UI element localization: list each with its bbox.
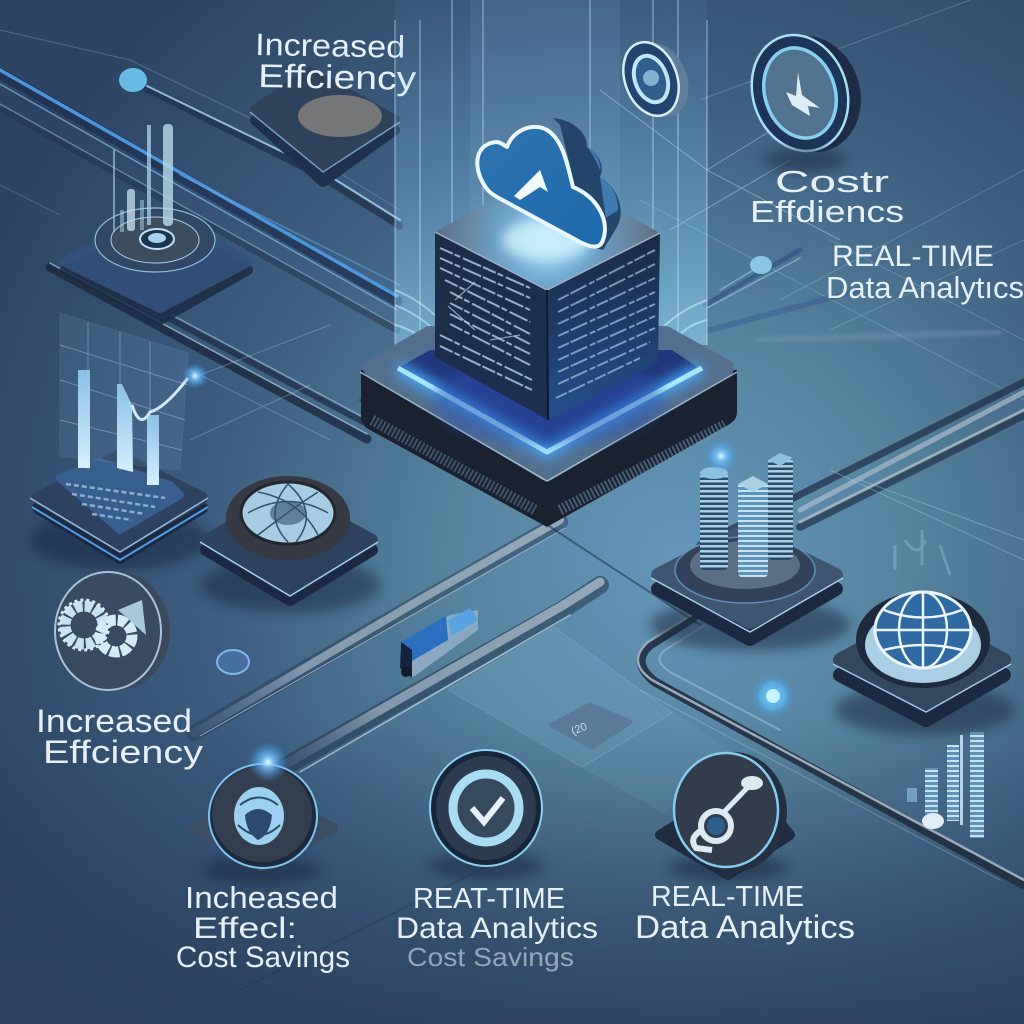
text: Increased Efficiency Cost Savings: Incheased — [185, 880, 338, 915]
central platform — [360, 335, 737, 527]
tower — [768, 458, 793, 560]
heading: Increased Efficiency left — [36, 703, 203, 770]
text: Real-Time Data Analytics Cost Savings — [396, 883, 598, 972]
icon: cloud — [477, 118, 621, 250]
heading: Increased Efficiency top: Increased — [255, 27, 405, 65]
text: Real-Time Data Analytics: REAL-TIME — [651, 881, 804, 913]
server towers platform — [650, 440, 850, 651]
small chip — [552, 705, 630, 747]
icon: medallion top center — [614, 34, 698, 125]
glass bar chart panel — [60, 313, 208, 485]
cube code lines left — [440, 248, 532, 390]
marker dot right — [750, 256, 772, 274]
shadow under clock — [763, 148, 847, 172]
isometric skyline platform — [65, 124, 248, 320]
icon: clock medallion — [737, 22, 876, 166]
text: Real-Time Data Analytics Cost Savings: Cost Savings — [407, 942, 574, 972]
bar cluster bottom right — [907, 732, 984, 838]
heading: Real-Time Data Analytics top right — [826, 240, 1024, 305]
heading: Increased Efficiency left: Increased — [36, 703, 192, 739]
data cube — [433, 170, 663, 445]
heading: Increased Efficiency top: Effciency — [258, 57, 417, 97]
text: Real-Time Data Analytics Cost Savings: Data Analytics — [396, 912, 598, 945]
icon: key medallion — [660, 752, 790, 882]
heading: Real-Time Data Analytics top right: Data Analytıcs — [826, 270, 1024, 305]
dial platform — [200, 476, 380, 613]
glowing node — [751, 674, 795, 718]
heading: Increased Efficiency top — [255, 27, 417, 97]
cube code lines right — [556, 250, 655, 398]
marker dot top-left — [119, 68, 147, 92]
heading: Cost Efficiency: Effdiencs — [750, 194, 904, 229]
circuit rails upper-left — [0, 30, 400, 440]
top-left platform — [250, 72, 400, 182]
data beam — [395, 0, 840, 345]
icon: check medallion — [428, 750, 544, 880]
text: Increased Efficiency Cost Savings: Effecl: — [193, 912, 297, 945]
heading: Cost Efficiency: Costr — [775, 164, 889, 199]
heading: Real-Time Data Analytics top right: REAL-TIME — [832, 240, 994, 273]
text: Real-Time Data Analytics Cost Savings: REAT-TIME — [413, 883, 565, 915]
marker dot left — [217, 650, 249, 674]
text: Increased Efficiency Cost Savings — [176, 880, 350, 974]
globe platform — [833, 592, 1015, 735]
circuit rails right — [700, 250, 1024, 560]
small chip: (20 — [570, 721, 589, 738]
chart platform — [30, 456, 210, 570]
text: Real-Time Data Analytics — [635, 881, 855, 945]
icon: gears medallion — [55, 572, 170, 690]
heading: Cost Efficiency — [750, 164, 904, 229]
train / data carrier — [400, 608, 478, 678]
heading: Increased Efficiency left: Effciency — [43, 734, 203, 770]
translucent floor panel — [448, 627, 730, 812]
text: Increased Efficiency Cost Savings: Cost Savings — [176, 941, 350, 974]
circuit rails lower — [194, 400, 1024, 990]
icon: shield medallion — [195, 742, 332, 884]
text: Real-Time Data Analytics: Data Analytics — [635, 909, 855, 945]
faint floating data — [895, 530, 950, 575]
